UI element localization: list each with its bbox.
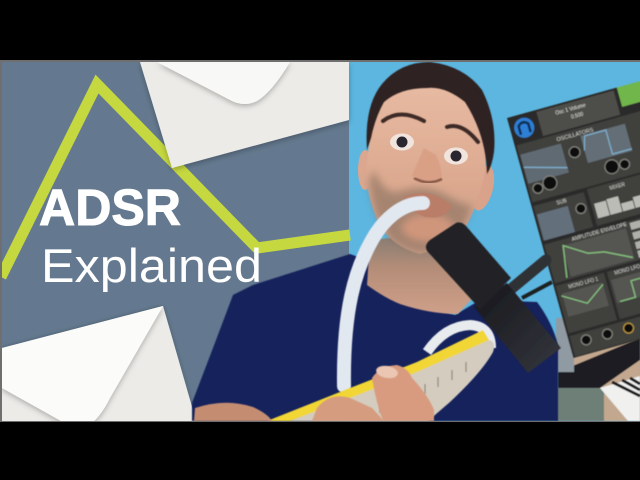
synth module panel [507,78,640,358]
nose [412,148,442,182]
knobs [532,146,631,194]
device notches [380,362,466,413]
tube [344,203,423,386]
ear left [358,150,372,190]
gray frame border [0,60,640,422]
device arc tube [427,325,491,352]
amp sliders [630,220,640,258]
keyboard [600,376,640,421]
section: mixer [591,178,640,218]
hair [367,62,494,174]
lfo1 label: MONO LFO 1 [568,277,599,291]
module sections [517,106,640,356]
fingers lower [312,396,384,421]
heading: Explained: Explained [41,239,262,292]
ADSR envelope line [1,84,350,277]
mic arm strut [522,282,552,298]
thumb nail [375,364,399,380]
lfo1 waveform [562,284,607,309]
knob right b [618,158,631,170]
panel: slate background [2,62,349,421]
section: amplitude envelope [557,218,640,278]
header label: Osc 1 Volume [555,103,587,117]
sub label: SUB [556,198,568,207]
sub graph [537,206,575,241]
section: sub [535,194,591,241]
microphone [426,222,561,373]
thumbnail frame [0,60,640,422]
device body [290,340,494,421]
section: mono lfo 1 [559,276,609,317]
sclera [390,134,414,150]
chin and lip tone [402,214,454,242]
ear right [468,163,498,213]
knob a [580,334,592,346]
knob right a [603,158,620,175]
synth device [267,325,494,421]
mic arm [505,260,546,294]
icon: logo [513,116,536,139]
panel: photo backdrop [349,62,640,421]
knob left b [542,175,558,191]
mic body [474,283,561,373]
stubble [369,170,472,251]
knob b [601,328,614,340]
title: ADSR Explained [39,179,262,292]
lower gear [556,388,604,421]
icon: top envelope [140,62,349,168]
module background [507,78,640,358]
section: mono lfo 2 [609,256,640,303]
sclera [444,148,468,164]
background studio gear [556,318,640,421]
neck [367,230,480,314]
oscillator graph right [580,124,632,163]
eye right [444,148,468,164]
oscillator graph left [520,144,569,184]
device yellow strip [267,330,489,421]
envelope body [140,62,349,168]
iris [396,136,408,148]
striped rack [556,318,574,372]
lfo2 graph [611,264,640,303]
header value: 0.500 [570,112,584,121]
mixer label: MIXER [609,182,626,192]
envelope flap [2,306,163,426]
green scope [617,80,640,107]
waveform left [523,166,568,169]
nostril shadow [414,178,442,182]
iris [450,150,462,162]
icon: bottom envelope [2,306,197,426]
face [366,78,487,254]
mixer faders [594,189,640,218]
mouth [404,193,452,218]
knob left a [532,182,544,194]
hand left [194,403,272,421]
amp waveform [558,229,633,278]
panel: artwork [1,62,640,426]
bottom knobs [580,322,635,346]
heading: ADSR: ADSR [39,179,181,236]
knob c [622,322,635,334]
hand right [372,365,434,421]
shirt [192,254,558,421]
eye left [390,134,414,150]
laptop stand [558,338,640,388]
knob center [568,145,581,159]
header box [536,91,620,136]
lfo1 graph [562,282,609,317]
back wall [573,340,640,421]
oscillators label: OSCILLATORS [556,127,595,143]
waveform right [583,128,632,156]
eyebrows [383,114,478,142]
logo disc [513,116,536,139]
amp graph [562,228,634,277]
keyboard body [600,376,640,421]
mic foam [426,222,511,309]
amp label: AMPLITUDE ENVELOPE [571,222,628,243]
black keys [612,378,640,396]
envelope flap [157,62,290,104]
lfo2 waveform [616,270,640,301]
section: oscillators [520,123,633,194]
logo glyph [518,121,531,135]
envelope body [2,306,197,424]
sub knob [575,202,587,215]
presenter [192,62,561,421]
